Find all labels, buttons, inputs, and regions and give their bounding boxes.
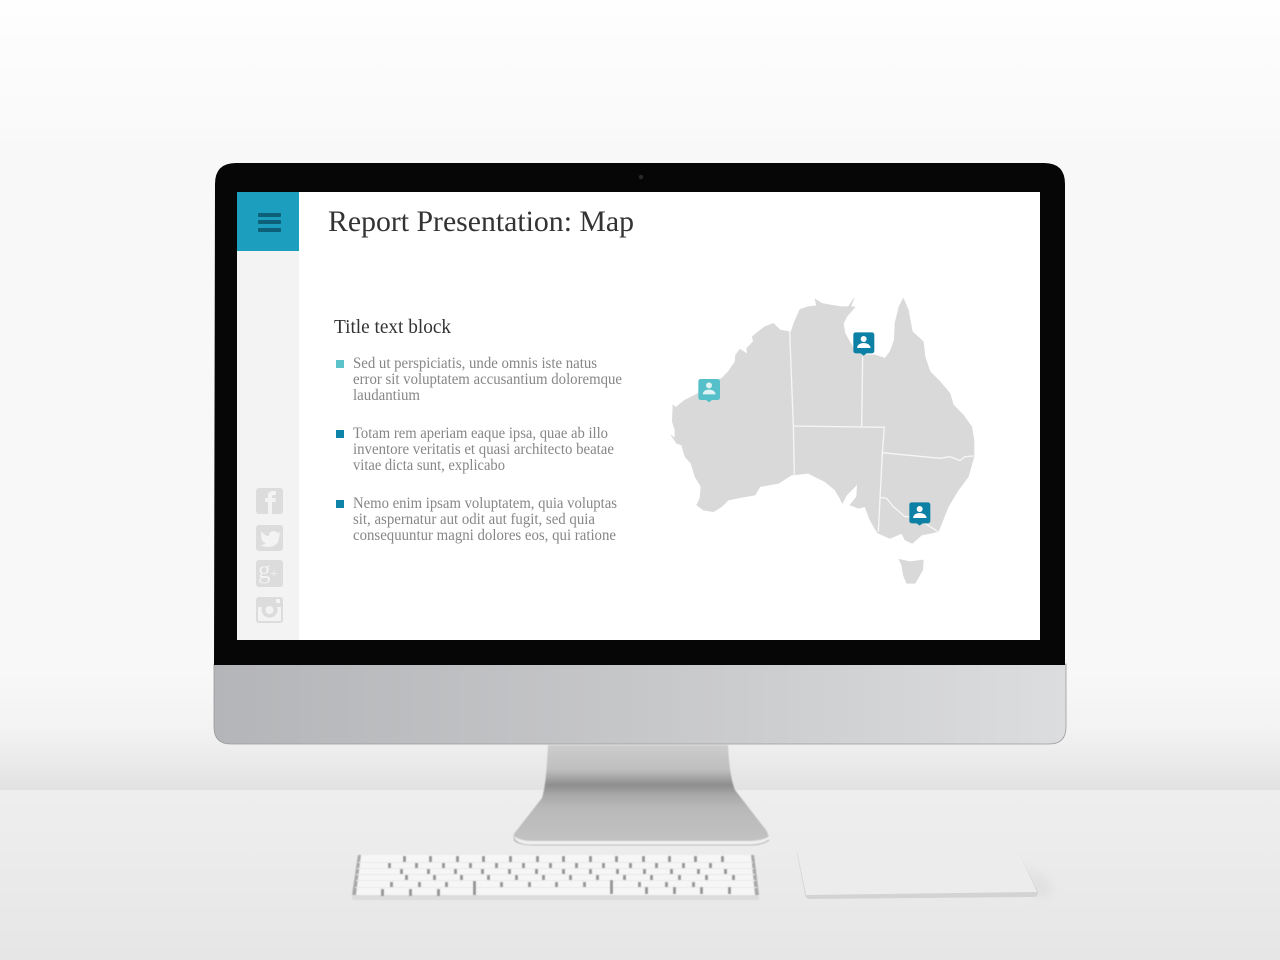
icon: instagram [256, 597, 283, 623]
sidebar [237, 251, 299, 640]
icon: facebook [256, 488, 283, 514]
bullet text 3: Nemo enim ipsam voluptatem, quia voluptas [353, 495, 617, 512]
bullet text 2: Totam rem aperiam eaque ipsa, quae ab illo [353, 425, 608, 442]
monitor stand [513, 745, 770, 845]
mainland [671, 298, 974, 543]
bullet text 3: sit, aspernatur aut odit aut fugit, sed quia [353, 511, 595, 528]
background: desk [0, 790, 1280, 960]
pin: Northern Territory [853, 332, 874, 356]
bullet text 1 [336, 355, 622, 404]
pin: Western Australia [698, 379, 720, 402]
bullet text 2: vitae dicta sunt, explicabo [353, 457, 505, 474]
bullet text 3 [336, 495, 617, 544]
title: Report Presentation: Map [328, 205, 634, 238]
map of Australia [671, 298, 974, 583]
webcam [639, 175, 643, 179]
screen [237, 192, 1040, 640]
bullet text 1: error sit voluptatem accusantium doloremque [353, 371, 622, 388]
bullet text 1: Sed ut perspiciatis, unde omnis iste natus [353, 355, 597, 372]
icon: google plus: + [270, 567, 278, 582]
bullet text 3: consequuntur magni dolores eos, qui ratione [353, 527, 616, 544]
text block heading: Title text block [334, 316, 451, 338]
state borders [790, 332, 974, 532]
Tasmania [899, 559, 923, 583]
menu tile [237, 192, 299, 251]
trackpad [797, 853, 1052, 899]
keyboard [352, 855, 759, 900]
icon: google plus: g [258, 557, 271, 584]
pin: Victoria [909, 502, 930, 526]
monitor chin [214, 664, 1066, 744]
bullet text 1: laudantium [353, 387, 420, 404]
bullet text 2 [336, 425, 614, 474]
icon: twitter [256, 525, 283, 551]
bullet text 2: inventore veritatis et quasi architecto beatae [353, 441, 614, 458]
monitor bezel [214, 163, 1065, 665]
icon: google plus [256, 557, 283, 587]
